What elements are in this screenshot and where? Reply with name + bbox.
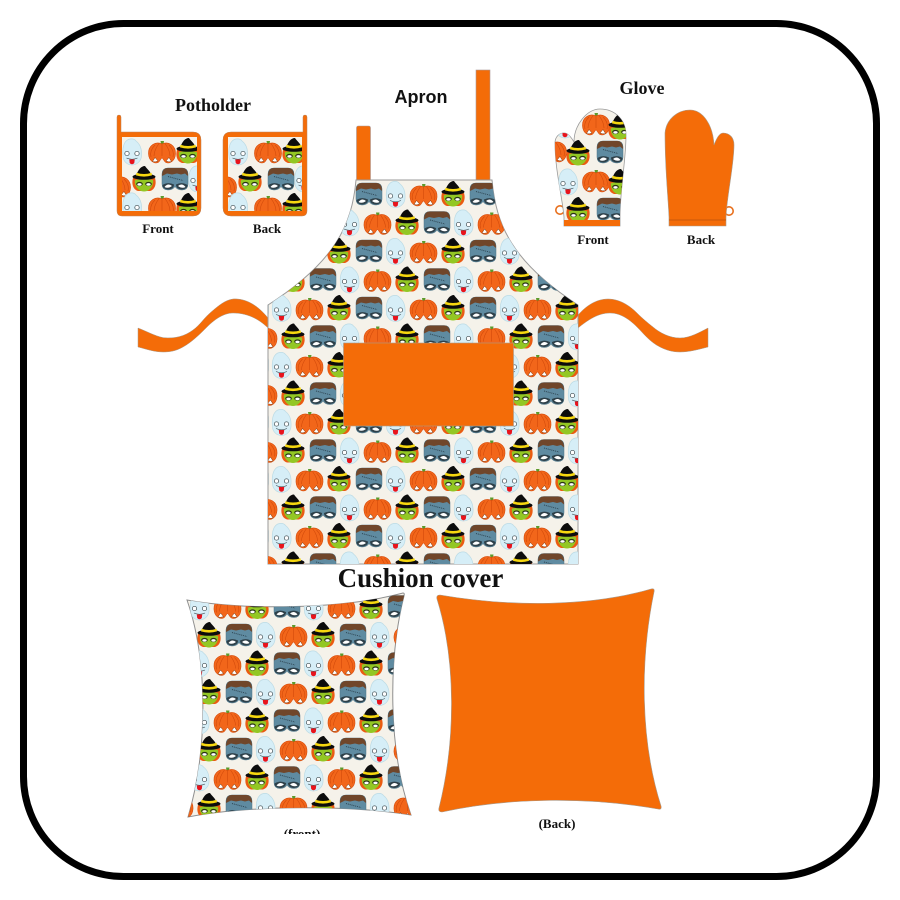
panel: potholder: [116, 98, 308, 233]
apron left waist tie: [138, 299, 268, 352]
label: potholder back: Back: [253, 221, 282, 236]
potholder front: [116, 114, 202, 216]
label: cushion back: (Back): [539, 816, 575, 831]
apron left neck strap: [356, 126, 370, 180]
glove back: [665, 110, 734, 226]
apron pocket: [344, 343, 514, 426]
panel: apron: [138, 70, 708, 564]
apron right waist tie: [578, 299, 708, 352]
apron right neck strap: [476, 70, 490, 180]
panel: glove: [554, 82, 734, 244]
label: glove back: Back: [687, 232, 716, 247]
label: cushion front (clipped): (front): [284, 826, 320, 841]
label: glove front: Front: [577, 232, 609, 247]
cushion front: [186, 592, 412, 818]
label: potholder front: Front: [142, 221, 174, 236]
cushion back: [437, 589, 661, 812]
glove front: [554, 108, 626, 226]
heading: glove: Glove: [620, 78, 665, 98]
heading: apron: Apron: [394, 87, 448, 107]
apron body fabric: [268, 180, 578, 564]
panel: cushion cover: [186, 568, 662, 834]
heading: potholder: Potholder: [175, 95, 251, 115]
heading: cushion cover: Cushion cover: [338, 563, 503, 593]
potholder back: [222, 114, 308, 216]
